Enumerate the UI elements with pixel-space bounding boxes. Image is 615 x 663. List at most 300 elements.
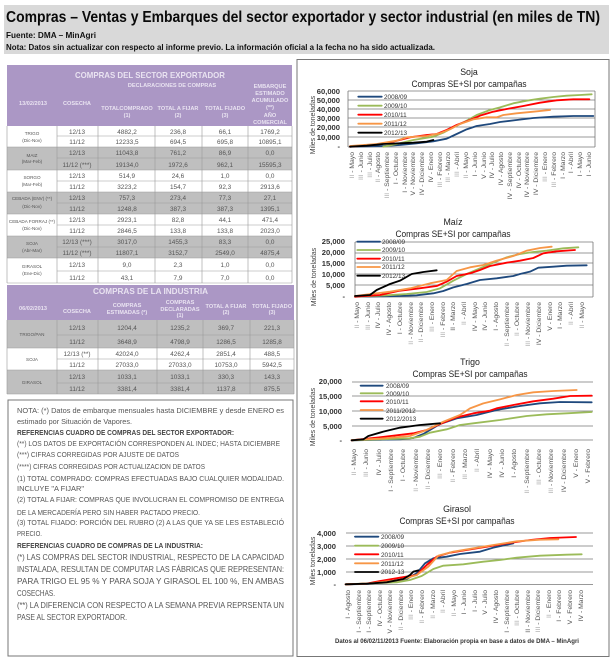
legend: 2011/12	[382, 264, 405, 271]
y axis: -	[339, 436, 342, 445]
x axis labels: II - Mayo	[354, 302, 361, 328]
x axis labels: IV - Julio	[376, 449, 383, 475]
column headers: COMPRAS	[166, 300, 195, 306]
table values: 0,0	[266, 150, 275, 157]
x axis labels: III - Julio	[367, 152, 374, 178]
x axis labels: IV - Junio	[499, 449, 506, 478]
table values: 154,7	[170, 184, 186, 191]
table values: 12/13	[69, 262, 85, 269]
table values: 3152,7	[168, 250, 188, 257]
grain row labels: (Dic-Nov)	[22, 204, 42, 209]
x axis labels: II - Abril	[461, 302, 468, 325]
legend	[386, 383, 417, 423]
y axis: 25,000	[322, 237, 345, 246]
grain row labels: SORGO	[23, 175, 41, 180]
column headers: EMBARQUE	[254, 84, 287, 90]
table values: 1,0	[221, 173, 230, 180]
table values: 273,4	[170, 195, 186, 202]
x axis labels: V - Noviembre	[410, 152, 417, 195]
table values: 11/12	[69, 228, 85, 235]
table values: 11/12 (***)	[62, 162, 92, 169]
table values: 761,2	[170, 150, 186, 157]
chart title: Maíz	[443, 217, 463, 227]
column headers: (1)	[124, 113, 131, 119]
column headers: (**)	[266, 105, 274, 111]
column headers: (1)	[177, 313, 184, 319]
x axis labels	[351, 449, 592, 494]
table values: 236,8	[170, 129, 186, 136]
x axis labels: I - Septiembre	[366, 590, 373, 633]
table values: 4875,4	[260, 250, 280, 257]
x axis labels: I - Abril	[568, 152, 575, 173]
x axis labels: I - Junio	[472, 152, 479, 176]
panel: notes box: (**) LOS DATOS DE EXPORTACIÓN CORRESPONDEN AL INDEC; HASTA DICIEMBRE	[17, 439, 280, 448]
table values: 143,3	[264, 374, 280, 381]
y axis: 20,000	[317, 123, 340, 132]
table values: 12/13	[69, 129, 85, 136]
x axis labels: I - Julio	[472, 590, 479, 612]
table values: 387,3	[170, 206, 186, 213]
x axis labels: II - Diciembre	[398, 590, 405, 630]
table values: 1033,1	[117, 374, 137, 381]
x axis labels: III - Junio	[358, 152, 365, 180]
chart subtitle: Compras SE+SI por campañas	[412, 369, 528, 379]
column headers: DECLARACIONES DE COMPRAS	[128, 83, 216, 89]
chart: girasol	[310, 504, 593, 633]
table values: 24,6	[172, 173, 185, 180]
x axis labels: V - Junio	[481, 152, 488, 179]
table values: 12/13	[69, 325, 85, 332]
table values: 42024,0	[115, 351, 139, 358]
column headers: 13/02/2013	[19, 101, 47, 107]
table values: 27033,0	[115, 362, 139, 369]
table values: 330,3	[218, 374, 234, 381]
column headers: COMPRAS	[113, 303, 142, 309]
table values: 471,4	[262, 217, 278, 224]
grain row labels: (Dic-Nov)	[22, 226, 42, 231]
table values: 1286,5	[216, 339, 236, 346]
table values: 12/13	[69, 374, 85, 381]
table values: 12/13 (**)	[64, 351, 90, 358]
table values: 0,0	[266, 239, 275, 246]
column headers: COSECHA	[63, 309, 91, 315]
table values: 1204,4	[117, 325, 137, 332]
table values: 2923,1	[117, 217, 137, 224]
data lines	[355, 242, 587, 297]
x axis labels: IV - Agosto	[493, 590, 500, 623]
chart: trigo	[310, 357, 593, 494]
chart subtitle: Compras SE+SI por campañas	[396, 229, 511, 239]
data lines	[352, 386, 592, 440]
x axis labels: III - Enero	[429, 302, 436, 332]
legend: 2009/10	[386, 391, 410, 398]
panel: notes box: NOTA: (*) Datos de embarque mensuales hasta DICIEMBRE y desde ENERO es	[17, 406, 284, 415]
table values: 2913,6	[260, 184, 280, 191]
table values: 27,1	[264, 195, 277, 202]
table values: 1137,8	[216, 386, 236, 393]
panel: notes box: (1) TOTAL COMPRADO: COMPRAS EFECTUADAS BAJO CUALQUIER MODALIDAD.	[17, 474, 284, 483]
y axis: 50,000	[317, 96, 340, 105]
legend	[382, 239, 406, 280]
x axis labels: II - Abril	[440, 590, 447, 613]
y axis: -	[342, 292, 345, 301]
x axis labels: III - Noviembre	[525, 302, 532, 347]
table values: 4882,2	[117, 129, 137, 136]
x axis labels: I - Noviembre	[402, 152, 409, 193]
x axis labels: I - Junio	[586, 152, 593, 176]
y axis: 10,000	[322, 270, 345, 279]
table heading: COMPRAS DEL SECTOR EXPORTADOR	[75, 70, 225, 80]
table values: 27033,0	[168, 362, 192, 369]
legend: 2011/2012	[386, 408, 416, 415]
x axis labels: I - Mayo	[577, 152, 584, 177]
legend: 2009/10	[384, 103, 408, 110]
table values: 221,3	[264, 325, 280, 332]
x axis labels: III - Octubre	[514, 590, 521, 626]
y axis: -	[337, 142, 340, 151]
x axis labels: I - Agosto	[345, 590, 352, 619]
table values: 387,3	[217, 206, 233, 213]
x axis labels: II - Septiembre	[524, 449, 531, 494]
x axis labels: II - Enero	[546, 590, 553, 618]
table values: 694,5	[170, 139, 186, 146]
grain row labels: MAIZ	[27, 153, 38, 158]
chart subtitle: Compras SE+SI por campañas	[412, 79, 527, 89]
x axis labels: III - Febrero	[437, 152, 444, 188]
table values: 66,1	[219, 129, 232, 136]
x axis labels: II - Abril	[474, 449, 481, 472]
panel: notes box: estimado por Situación de Vapores.	[17, 417, 132, 426]
x axis labels: II - Febrero	[450, 449, 457, 483]
grain row labels: SOJA	[26, 357, 39, 362]
x axis labels: IV - Diciembre	[533, 152, 540, 195]
table values: 11/12	[69, 386, 85, 393]
x axis labels: I - Febrero	[556, 590, 563, 622]
legend: 2010/11	[381, 552, 404, 559]
panel: notes box: (*) LAS COMPRAS DEL SECTOR INDUSTRIAL, RESPECTO DE LA CAPACIDAD	[17, 552, 284, 562]
x axis labels: IV - Octubre	[516, 152, 523, 189]
chart title: Soja	[460, 67, 478, 77]
table values: 4798,9	[170, 339, 190, 346]
column headers: AÑO	[264, 112, 277, 119]
legend: 2012/13	[384, 130, 408, 137]
y axis: 40,000	[317, 105, 340, 114]
x axis labels: III - Marzo	[445, 152, 452, 183]
table values: 514,9	[119, 173, 135, 180]
table values: 1395,1	[260, 206, 280, 213]
x axis labels: III - Enero	[437, 449, 444, 479]
legend: 2008/09	[384, 94, 408, 101]
x axis labels: IV - Septiembre	[507, 152, 514, 199]
table heading: COMPRAS DE LA INDUSTRIA	[93, 287, 208, 296]
legend	[384, 94, 408, 137]
table values: 3381,4	[170, 386, 190, 393]
x axis labels: III - Noviembre	[548, 449, 555, 494]
y axis: 3,000	[317, 542, 336, 551]
table values: 10753,0	[214, 362, 238, 369]
x axis labels: I - Octubre	[400, 449, 407, 481]
table values: 1033,1	[170, 374, 190, 381]
y axis: 10,000	[317, 133, 340, 142]
x axis labels: II - Noviembre	[413, 449, 420, 492]
panel: notes box: PARA TRIGO EL 95 % Y PARA SOJA Y GIRASOL EL 100 %, EN AMBAS	[17, 576, 284, 586]
column headers: 06/02/2013	[19, 306, 47, 312]
chart: soja	[310, 67, 595, 199]
x axis labels: II - Mayo	[349, 152, 356, 178]
x axis labels	[349, 152, 593, 199]
legend: 2008/09	[381, 534, 405, 541]
grain row labels: TRIGO	[25, 131, 40, 136]
y axis: 30,000	[317, 114, 340, 123]
grain row labels: CEBADA FORRAJ (**)	[9, 219, 56, 224]
panel: notes box: (**) LA DIFERENCIA CON RESPECTO A LA SEMANA PREVIA REPRSENTA UN	[17, 600, 284, 610]
x axis labels: III - Febrero	[440, 302, 447, 338]
legend: 2009/10	[381, 543, 405, 550]
x axis labels: III - Febrero	[551, 152, 558, 188]
table values: 7,0	[221, 275, 230, 282]
table values: 0,0	[266, 173, 275, 180]
table values: 86,9	[219, 150, 232, 157]
chart subtitle: Compras SE+SI por campañas	[400, 516, 515, 526]
x axis labels: II - Abril	[568, 302, 575, 325]
x axis labels: III - Junio	[363, 449, 370, 477]
y axis title: Miles de toneladas	[310, 387, 317, 446]
y axis	[317, 529, 336, 589]
panel: notes box: REFERENCIAS CUADRO DE COMPRAS DE LA INDUSTRIA:	[17, 542, 203, 550]
x axis labels: IV - Agosto	[498, 152, 505, 185]
column headers: COMERCIAL	[253, 120, 288, 126]
column headers: TOTAL FIJADO	[205, 106, 246, 112]
x axis labels: II - Marzo	[430, 590, 437, 619]
table values: 1455,3	[168, 239, 188, 246]
table values: 1972,6	[168, 162, 188, 169]
legend: 2012/2013	[386, 416, 417, 423]
x axis labels: IV - Julio	[489, 152, 496, 178]
table values: 11/12	[69, 206, 85, 213]
table values: 11/12	[69, 362, 85, 369]
table values: 19134,0	[115, 162, 139, 169]
x axis labels: I - Septiembre	[504, 590, 511, 633]
x axis labels: IV - Junio	[482, 302, 489, 331]
x axis labels: II - Mayo	[463, 152, 470, 178]
x axis labels: V - Noviembre	[387, 590, 394, 633]
x axis labels: III - Diciembre	[535, 590, 542, 632]
x axis labels: IV - Octubre	[377, 590, 384, 627]
panel: notes box: PASE AL SECTOR EXPORTADOR.	[17, 612, 127, 622]
legend: 2008/09	[382, 239, 406, 246]
x axis labels: III - Junio	[365, 302, 372, 330]
grain row labels: (Mar-Feb)	[22, 159, 43, 164]
data lines	[350, 94, 593, 147]
column headers: (2)	[223, 310, 230, 316]
x axis labels: III - Octubre	[536, 449, 543, 485]
x axis labels: II - Marzo	[450, 302, 457, 331]
panel: notes box: COSECHAS.	[17, 588, 55, 598]
x axis labels: II - Octubre	[514, 302, 521, 336]
panel: charts frame	[297, 60, 609, 656]
table values: 695,8	[217, 139, 233, 146]
table values: 1,0	[221, 262, 230, 269]
x axis labels: IV - Diciembre	[561, 449, 568, 492]
x axis labels: I - Septiembre	[388, 449, 395, 492]
y axis: 4,000	[317, 529, 336, 538]
table values: 1248,8	[117, 206, 137, 213]
x axis labels: IV - Mayo	[472, 302, 479, 331]
table values: 12/13	[69, 195, 85, 202]
table values: 11/12	[69, 275, 85, 282]
grain row labels: CEBADA (ENV) (**)	[12, 196, 53, 201]
x axis labels: I - Octubre	[393, 152, 400, 184]
x axis labels: IV - Mayo	[487, 449, 494, 478]
x axis labels: I - Agosto	[511, 449, 518, 478]
x axis labels: III - Abril	[454, 152, 461, 177]
table values: 11/12 (***)	[62, 250, 92, 257]
y axis: 5,000	[323, 422, 342, 431]
header band	[4, 5, 609, 54]
table values: 11/12	[69, 184, 85, 191]
panel: notes box: REFERENCIAS CUADRO DE COMPRAS DEL SECTOR EXPORTADOR:	[17, 429, 234, 437]
table values: 5942,5	[262, 362, 282, 369]
legend: 2010/11	[386, 399, 409, 406]
panel: notes box: (2) TOTAL A FIJAR: COMPRAS QUE INVOLUCRAN EL COMPROMISO DE ENTREGA	[17, 495, 284, 504]
legend: 2012/13	[382, 273, 406, 280]
x axis labels	[354, 302, 586, 347]
table values: 44,1	[219, 217, 232, 224]
table values: 92,3	[219, 184, 232, 191]
y axis: 15,000	[322, 259, 345, 268]
x axis labels: V - Febrero	[567, 590, 574, 624]
panel: notes box: (****) CIFRAS CORREGIDAS POR ACTUALIZACION DE DATOS	[17, 462, 205, 471]
x axis labels: II - Diciembre	[425, 449, 432, 489]
table values: 1285,8	[262, 339, 282, 346]
table values: 11807,1	[116, 250, 139, 257]
grain row labels: (Abr-Mar)	[22, 248, 42, 253]
x axis labels: II - Diciembre	[418, 302, 425, 342]
x axis labels: V - Enero	[547, 302, 554, 331]
grain row labels: (Ene-Dic)	[22, 271, 42, 276]
column headers: TOTAL FIJADO	[252, 304, 293, 310]
note line: Nota: Datos sin actualizar con respecto al informe previo. La información oficial a la fecha no ha sido actualizada.	[6, 43, 435, 52]
grain row labels: GIRASOL	[22, 264, 43, 269]
table values: 12/13 (***)	[62, 239, 92, 246]
y axis: -	[333, 580, 336, 589]
x axis labels: II - Agosto	[375, 152, 382, 183]
column headers: (2)	[175, 113, 182, 119]
panel: compras del sector exportador table	[7, 65, 292, 283]
column headers: TOTALCOMPRADO	[101, 106, 153, 112]
table values: 962,1	[217, 162, 233, 169]
y axis	[317, 87, 340, 151]
x axis labels: IV - Diciembre	[536, 302, 543, 345]
panel: notes box: INSTALADA, RESULTAN DE COMPUTAR LAS FÁBRICAS QUE REPRESENTAN:	[17, 564, 284, 574]
y axis: 20,000	[322, 248, 345, 257]
source line: Fuente: DMA – MinAgri	[6, 30, 96, 40]
x axis labels: II - Febrero	[419, 590, 426, 624]
table values: 12/13	[69, 217, 85, 224]
x axis labels: III - Enero	[408, 590, 415, 620]
y axis	[322, 237, 345, 301]
y axis: 5,000	[326, 281, 345, 290]
data lines	[346, 537, 582, 584]
x axis labels: I - Octubre	[397, 302, 404, 334]
table values: 2846,5	[117, 228, 137, 235]
y axis title: Miles de toneladas	[310, 95, 317, 154]
table values: 43,1	[121, 275, 134, 282]
table values: 12/13	[69, 150, 85, 157]
table values: 133,8	[170, 228, 186, 235]
x axis labels: I - Junio	[461, 590, 468, 614]
y axis: 20,000	[319, 377, 342, 386]
table values: 11/12	[69, 339, 85, 346]
x axis labels: IV - Enero	[428, 152, 435, 183]
panel: notes box: DE LA MERCADERÍA PERO SIN HABER PACTADO PRECIO.	[17, 508, 200, 517]
column headers: ACUMULADO	[252, 98, 289, 104]
y axis: 15,000	[319, 392, 342, 401]
y axis: 1,000	[317, 568, 336, 577]
panel: notes box: (3) TOTAL FIJADO: PORCIÓN DEL RUBRO (2) A LAS QUE YA SE LES ESTABLECIÓ	[17, 518, 284, 527]
column headers: ESTIMADO	[255, 91, 285, 97]
panel: notes box	[8, 400, 293, 656]
table values: 2851,4	[216, 351, 236, 358]
grain row labels: (Mar-Feb)	[22, 182, 43, 187]
x axis labels	[345, 590, 585, 633]
grain row labels: (Dic-Nov)	[22, 138, 42, 143]
x axis labels: V - Julio	[482, 590, 489, 615]
legend	[381, 534, 405, 576]
chart: maiz	[311, 217, 593, 347]
table values: 7,9	[174, 275, 183, 282]
x axis labels: I - Septiembre	[356, 590, 363, 633]
x axis labels: II - Septiembre	[504, 302, 511, 347]
legend: 2010/11	[384, 112, 407, 119]
table values: 2023,0	[260, 228, 280, 235]
legend: 2008/09	[386, 383, 410, 390]
y axis: 60,000	[317, 87, 340, 96]
column headers: TOTAL A FIJAR	[206, 304, 246, 310]
table values: 4262,4	[170, 351, 190, 358]
y axis: 10,000	[319, 407, 342, 416]
column headers	[19, 83, 289, 126]
table values: 9,0	[123, 262, 132, 269]
column headers	[19, 300, 293, 319]
panel: notes box: INCLUYE "A FIJAR"	[17, 484, 84, 493]
table values: 488,5	[264, 351, 280, 358]
table values: 12/13	[69, 173, 85, 180]
table values: 1769,2	[260, 129, 280, 136]
panel: notes box: PRECIO.	[17, 529, 42, 538]
column headers: DECLARADAS	[160, 307, 200, 313]
grain row labels: SOJA	[26, 241, 39, 246]
table values	[64, 325, 282, 393]
x axis labels: I - Marzo	[560, 152, 567, 179]
grain row labels	[9, 131, 56, 276]
legend: 2009/10	[382, 247, 406, 254]
table values	[62, 129, 282, 282]
column headers: COSECHA	[63, 101, 91, 107]
table values: 1235,2	[170, 325, 190, 332]
table values: 3223,2	[117, 184, 137, 191]
legend: 2011/12	[381, 561, 404, 568]
column headers: ESTIMADAS (*)	[107, 310, 147, 316]
column headers: (3)	[222, 113, 229, 119]
x axis labels: II - Noviembre	[525, 590, 532, 633]
table values: 82,8	[172, 217, 185, 224]
table values: 3648,9	[117, 339, 137, 346]
table values: 757,3	[119, 195, 135, 202]
table values: 875,5	[264, 386, 280, 393]
chart title: Girasol	[443, 504, 471, 514]
table values: 3017,0	[117, 239, 137, 246]
